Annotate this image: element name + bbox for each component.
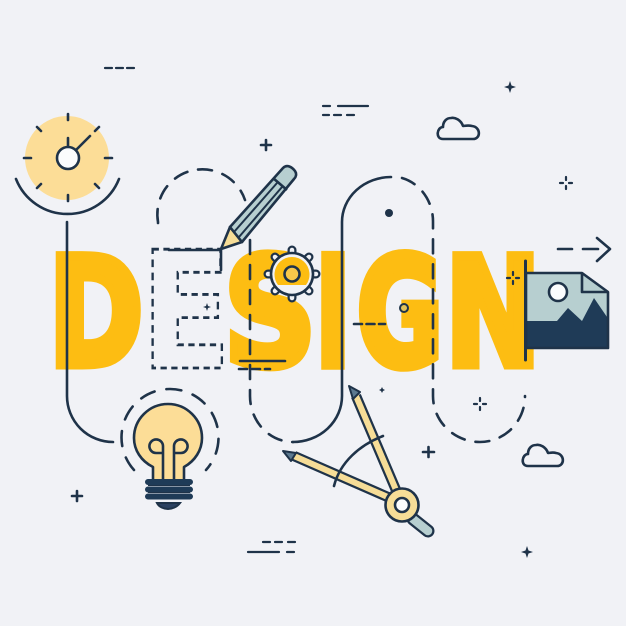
gear icon bbox=[268, 250, 316, 298]
pencil guide lines at E bbox=[169, 250, 221, 270]
title: DESIGN yellow letters bbox=[49, 226, 541, 401]
letter I: I bbox=[316, 227, 350, 401]
letter D: D bbox=[49, 227, 143, 401]
dashed capsule from E over pencil bbox=[157, 169, 245, 223]
star near compass bbox=[379, 387, 385, 393]
long flowing line through S, I and G bbox=[250, 177, 525, 442]
dashes left of G bbox=[354, 323, 385, 325]
top dash marks right bbox=[323, 106, 368, 115]
plus sign bbox=[261, 140, 271, 150]
small circle on G bbox=[400, 304, 408, 312]
letter G: G bbox=[357, 226, 443, 401]
star bottom right bbox=[521, 546, 533, 558]
dashes at base of S bbox=[240, 360, 285, 362]
bottom dash marks bbox=[248, 542, 295, 552]
image card icon bbox=[526, 261, 608, 360]
star top right bbox=[504, 81, 516, 93]
dot above G bbox=[385, 209, 393, 217]
sparkle lower right bbox=[474, 398, 486, 410]
arrow bbox=[558, 238, 610, 261]
dashed letter E: E bbox=[140, 218, 232, 407]
pencil icon bbox=[221, 166, 296, 249]
sparkle on N bbox=[507, 272, 519, 284]
top dash marks left bbox=[105, 67, 135, 69]
light bulb icon bbox=[122, 389, 219, 509]
star inside E bbox=[203, 303, 211, 311]
clock icon bbox=[16, 114, 119, 214]
plus right of compass bbox=[423, 447, 434, 457]
letter N: N bbox=[445, 227, 541, 401]
sparkle upper right bbox=[560, 177, 572, 189]
cloud bottom bbox=[523, 445, 563, 466]
connecting line from clock to bulb bbox=[67, 222, 113, 442]
letter S: S bbox=[224, 226, 316, 400]
cloud top bbox=[438, 118, 479, 139]
plus left of bulb bbox=[72, 491, 82, 501]
compass icon bbox=[283, 386, 428, 531]
